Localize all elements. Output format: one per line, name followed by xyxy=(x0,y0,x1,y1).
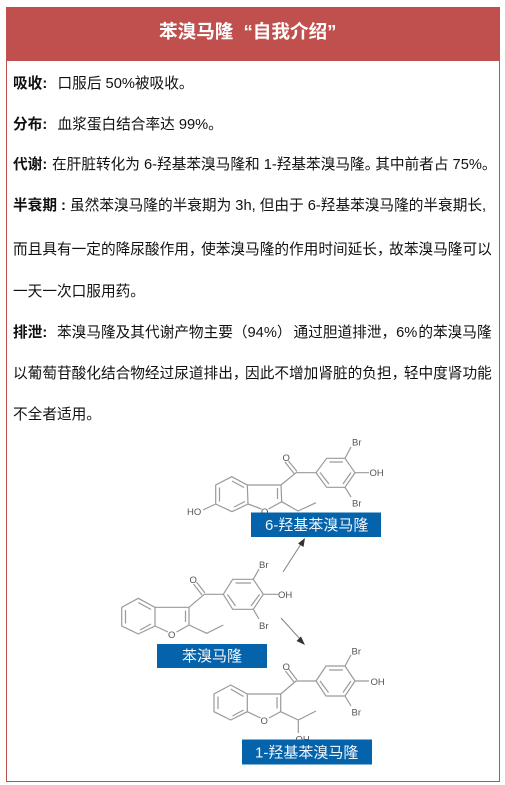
molecule: 6-hydroxybenzbromarone xyxy=(187,438,384,518)
molecule: benzbromarone: O xyxy=(168,630,175,641)
text: absorption: 吸收: xyxy=(13,76,47,92)
molecule: 6-hydroxybenzbromarone: HO xyxy=(187,507,201,518)
arrow: down to 1-hydroxy metabolite xyxy=(281,618,305,645)
molecule: 6-hydroxybenzbromarone: Br xyxy=(352,498,362,510)
label: benzbromarone: 苯溴马隆 xyxy=(182,648,242,665)
arrow: up to 6-hydroxy metabolite xyxy=(283,538,305,572)
label: 1-hydroxybenzbromarone: 1-羟基苯溴马隆 xyxy=(255,744,358,762)
text: metabolism: 代谢: xyxy=(13,157,47,173)
title: 苯溴马隆 自我介绍” xyxy=(159,21,336,42)
title: “ xyxy=(243,21,253,42)
text: half-life xyxy=(13,197,492,300)
text: absorption: 口服后 50%被吸收。 xyxy=(58,76,194,92)
text: excretion: 苯溴马隆及其代谢产物主要（94%）通过胆道排泄，6%的苯溴马隆 xyxy=(57,325,492,341)
molecule: 1-hydroxybenzbromarone: Br xyxy=(352,708,361,718)
molecule: 1-hydroxybenzbromarone: OH xyxy=(296,734,310,746)
text: half-life: 而且具有一定的降尿酸作用 使苯溴马隆的作用时间延长 故苯溴马隆可以 xyxy=(13,242,492,258)
label: 6-hydroxybenzbromarone: 6-羟基苯溴马隆 xyxy=(265,517,368,534)
text: half-life: ， xyxy=(189,242,204,258)
text: half-life: 虽然苯溴马隆的半衰期为 3h, 但由于 6-羟基苯溴马隆的半衰期长, xyxy=(70,198,486,214)
text: excretion xyxy=(13,324,492,423)
molecule: benzbromarone xyxy=(122,560,292,641)
text: metabolism: 在肝脏转化为 6-羟基苯溴马隆和 1-羟基苯溴马隆 其中前者占 75%。 xyxy=(52,157,497,173)
text: half-life: 一天一次口服用药。 xyxy=(13,284,145,300)
molecule: benzbromarone: OH xyxy=(278,590,292,601)
title banner xyxy=(6,7,500,61)
text: excretion: ， xyxy=(392,366,406,382)
molecule: 6-hydroxybenzbromarone: O xyxy=(261,507,268,518)
molecule: 1-hydroxybenzbromarone xyxy=(214,646,385,746)
molecule: 1-hydroxybenzbromarone: Br xyxy=(352,646,361,658)
molecule: 1-hydroxybenzbromarone: O xyxy=(282,662,290,673)
text: excretion: 不全者适用。 xyxy=(13,407,101,423)
text: excretion: 以葡萄苷酸化结合物经过尿道排出 因此不增加肾脏的负担 轻中度肾功能 xyxy=(13,366,492,382)
text: distribution: 血浆蛋白结合率达 99%。 xyxy=(58,117,223,133)
text: metabolism: 。 xyxy=(365,157,379,173)
label: 1-hydroxybenzbromarone xyxy=(242,740,372,764)
label: benzbromarone xyxy=(157,644,267,668)
text: distribution: 分布: xyxy=(13,117,47,133)
molecule: 6-hydroxybenzbromarone: OH xyxy=(370,468,384,479)
text: excretion: ， xyxy=(233,366,248,382)
label: 6-hydroxybenzbromarone xyxy=(251,512,381,537)
molecule: benzbromarone: O xyxy=(190,575,197,586)
molecule: 6-hydroxybenzbromarone: Br xyxy=(352,438,362,448)
molecule: benzbromarone: Br xyxy=(259,560,268,571)
text: excretion: 排泄: xyxy=(13,325,47,341)
molecule: benzbromarone: Br xyxy=(259,621,268,632)
text: half-life: ， xyxy=(377,242,392,258)
text: half-life: 半衰期 : xyxy=(13,198,66,214)
molecule: 1-hydroxybenzbromarone: O xyxy=(260,716,268,727)
molecule: 1-hydroxybenzbromarone: OH xyxy=(370,677,385,688)
molecule: 6-hydroxybenzbromarone: O xyxy=(282,453,290,464)
